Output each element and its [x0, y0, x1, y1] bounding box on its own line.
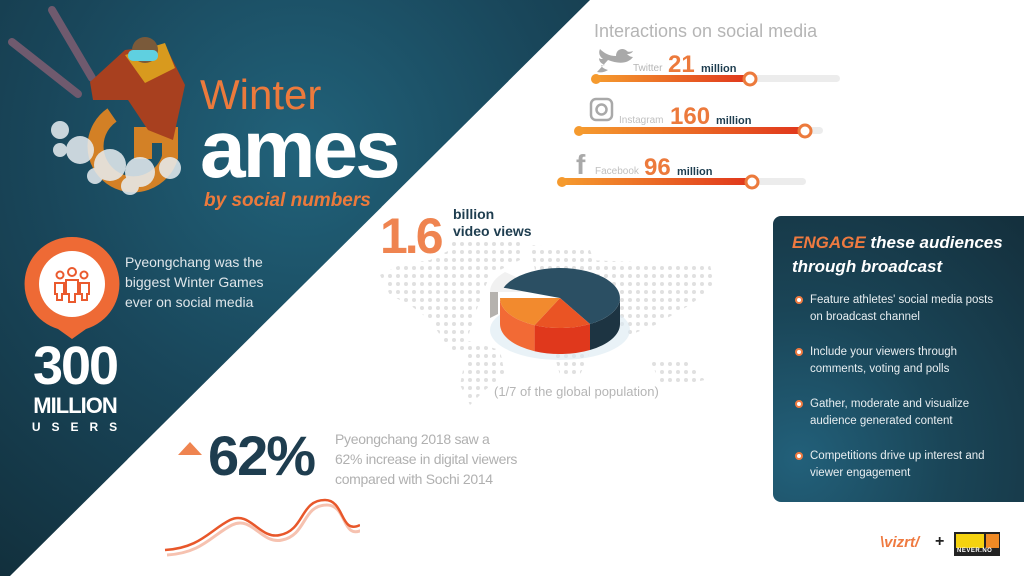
stat: 1.6 billion video views: billion: [453, 206, 494, 222]
logos: vizrt + never.no: NEVER.NO: [957, 548, 992, 554]
text: digital viewers increase: compared with Sochi 2014: [335, 471, 493, 487]
stat: 1.6 billion video views: video views: [453, 223, 532, 239]
logos: vizrt + never.no: +: [935, 533, 944, 550]
bar: twitter: million: [701, 63, 737, 75]
text: digital viewers increase: 62% increase in digital viewers: [335, 451, 517, 467]
stat: 1.6 billion video views: [380, 206, 532, 264]
heading: engage: [792, 233, 1003, 276]
stat: 300 million users: USERS: [32, 420, 128, 434]
bar: instagram: million: [716, 115, 752, 127]
panel: engage audiences: [773, 216, 1024, 502]
stat: 300 million users: MILLION: [33, 393, 117, 418]
title: Winter: [200, 71, 321, 118]
stat: 300 million users: 300: [33, 336, 117, 396]
bar: facebook: f: [576, 149, 586, 180]
list: engagement tips: [795, 294, 993, 479]
title: ames: [200, 104, 398, 195]
list: engagement tips: Feature athletes' social media posts on broadcast channel: [810, 294, 993, 323]
chart: social bars: [557, 49, 840, 190]
bar: twitter: [591, 49, 840, 85]
chart: dotted world map with pie: [380, 242, 712, 405]
logos: vizrt + never.no: \vizrt/: [880, 534, 919, 551]
chart: wave line: [164, 498, 360, 556]
bar: twitter: Twitter: [633, 63, 663, 74]
bar: instagram: 160: [670, 103, 710, 130]
text: global population: (1/7 of the global population): [494, 384, 659, 399]
list: engagement tips: Gather, moderate and visualize audience generated content: [810, 398, 969, 427]
heading: engage: ENGAGE these audiences: [792, 233, 1003, 252]
icon: up triangle: [178, 442, 202, 455]
text: biggest winter games: Pyeongchang was the biggest Winter Games ever on social media: [125, 254, 264, 310]
text: digital viewers increase: [335, 431, 517, 487]
bar: twitter: 21: [668, 51, 695, 78]
bar: facebook: million: [677, 166, 713, 178]
chart: 3D pie: [490, 268, 630, 360]
title: by social numbers: [204, 190, 371, 211]
text: digital viewers increase: Pyeongchang 2018 saw a: [335, 431, 490, 447]
stat: 300 million users: [32, 336, 128, 434]
list: engagement tips: Include your viewers through comments, voting and polls: [810, 346, 957, 375]
bar: instagram: [574, 99, 823, 137]
logos: vizrt + never.no: [880, 532, 1000, 556]
stat: 62%: 62%: [208, 424, 314, 487]
bar: facebook: [557, 149, 806, 188]
bar: facebook: Facebook: [595, 166, 640, 177]
title: [200, 71, 398, 211]
list: engagement tips: Competitions drive up interest and viewer engagement: [810, 450, 985, 479]
icon: location pin with people: [24, 237, 120, 339]
bar: instagram: Instagram: [619, 115, 663, 126]
heading: engage: through broadcast: [792, 257, 942, 276]
bar: facebook: 96: [644, 154, 671, 181]
stat: 1.6 billion video views: 1.6: [380, 208, 441, 264]
icon: skier illustration: [8, 6, 185, 195]
heading: interactions on social media: Interactions on social media: [594, 21, 817, 41]
